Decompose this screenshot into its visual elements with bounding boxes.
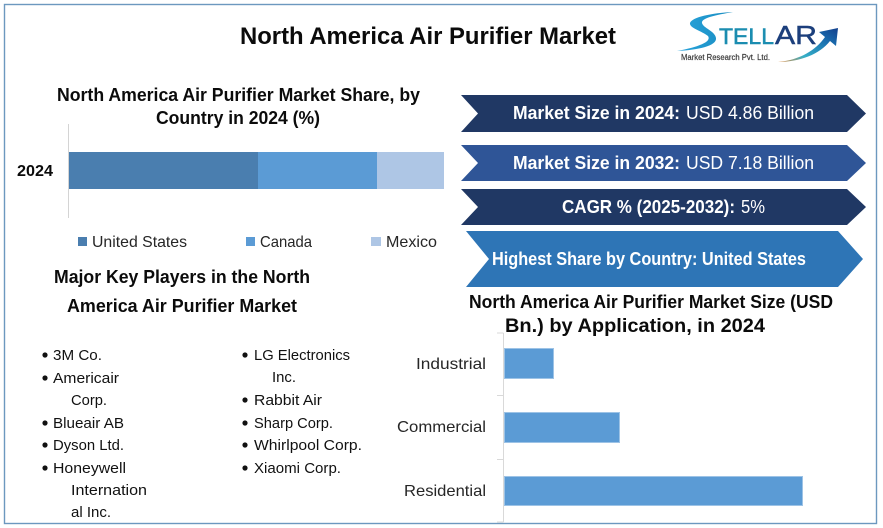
list: key players column 1: Honeywell (53, 460, 126, 477)
banner: market size 2032 (461, 145, 866, 181)
banner: market size 2032: USD 7.18 Billion (686, 153, 814, 173)
stacked bar chart: share by country (17, 124, 444, 218)
list: key players column 2 (242, 347, 362, 477)
heading: market share chart (57, 85, 420, 128)
banner: CAGR: CAGR % (2025-2032): (562, 197, 735, 217)
logo: Stellar Market Research: TELL (719, 24, 774, 49)
banner: highest share (466, 231, 863, 287)
heading: application chart: Bn.) by Application, in 2024 (505, 316, 765, 337)
bar: Commercial (397, 412, 620, 442)
banner: market size 2024 (461, 95, 866, 132)
heading: key players: Major Key Players in the North (54, 267, 310, 287)
heading: application chart (469, 292, 833, 337)
bar: United States (69, 152, 258, 189)
list: key players column 2: Inc. (272, 369, 296, 386)
axis label: 2024: 2024 (17, 163, 53, 180)
bar: Industrial (416, 348, 554, 378)
bar: Canada (258, 152, 377, 189)
bar: Residential: Residential (404, 483, 486, 500)
banner: CAGR: 5% (741, 197, 765, 217)
heading: market share chart: Country in 2024 (%) (156, 108, 320, 128)
bar: Residential (404, 476, 802, 506)
list: key players column 1: Corp. (71, 392, 107, 409)
list: key players column 2: Rabbit Air (254, 392, 322, 409)
list: key players column 1 (42, 347, 147, 521)
legend (78, 234, 437, 251)
bar chart: size by application (397, 333, 802, 522)
legend: Mexico (386, 234, 437, 251)
legend: Canada (260, 234, 312, 251)
logo: Stellar Market Research: Market Research Pvt. Ltd. (681, 53, 770, 62)
list: key players column 1: Internation (71, 482, 147, 499)
list: key players column 2: Whirlpool Corp. (254, 437, 362, 454)
list: key players column 1: al Inc. (71, 504, 111, 521)
banner: market size 2024: USD 4.86 Billion (686, 103, 814, 123)
title: North America Air Purifier Market (240, 23, 616, 50)
logo: Stellar Market Research: AR (775, 20, 817, 50)
bar: Commercial: Commercial (397, 419, 486, 436)
heading: application chart: North America Air Purifier Market Size (USD (469, 292, 833, 312)
banner: market size 2032: Market Size in 2032: (513, 153, 680, 173)
list: key players column 1: Dyson Ltd. (53, 437, 124, 454)
list: key players column 1: Blueair AB (53, 415, 124, 432)
list: key players column 2: Sharp Corp. (254, 415, 333, 432)
list: key players column 2: LG Electronics (254, 347, 350, 364)
banner: highest share: Highest Share by Country: United States (492, 249, 806, 269)
bar: Industrial: Industrial (416, 356, 486, 373)
banner: market size 2024: Market Size in 2024: (513, 103, 680, 123)
heading: key players: America Air Purifier Market (67, 296, 297, 316)
list: key players column 2: Xiaomi Corp. (254, 460, 341, 477)
list: key players column 1: 3M Co. (53, 347, 102, 364)
legend: United States (92, 234, 187, 251)
heading: market share chart: North America Air Purifier Market Share, by (57, 85, 420, 105)
banner: CAGR (461, 189, 866, 225)
logo: Stellar Market Research (677, 12, 838, 62)
list: key players column 1: Americair (53, 370, 119, 387)
bar: Mexico (377, 152, 444, 189)
heading: key players (54, 267, 310, 316)
